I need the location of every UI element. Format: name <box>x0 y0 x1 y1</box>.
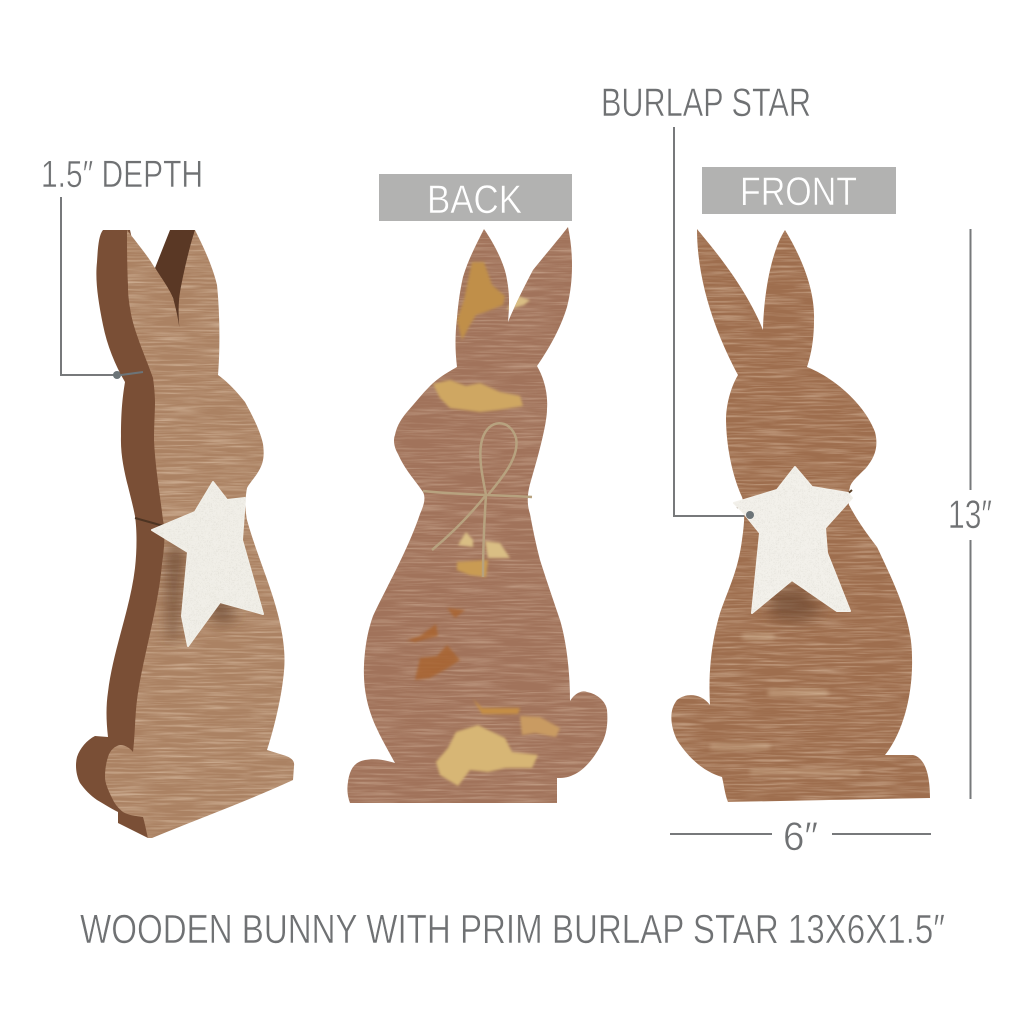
twine bow <box>423 423 532 577</box>
wood highlights <box>710 634 860 774</box>
twine <box>135 518 185 532</box>
star shadow <box>165 540 240 640</box>
chipped paint patches <box>433 262 560 786</box>
dimension: height 13 inches: 13″ <box>948 493 992 537</box>
burlap star: side <box>152 482 263 646</box>
callout: burlap star <box>601 81 811 516</box>
bunny: front view <box>671 229 930 802</box>
dimension: width 6 inches: 6″ <box>783 815 818 859</box>
label: front: FRONT <box>740 170 857 214</box>
bunny: back view <box>340 220 615 810</box>
side depth edge <box>76 230 170 838</box>
burlap star: front <box>734 467 852 613</box>
callout: burlap star: BURLAP STAR <box>601 81 811 125</box>
callout dot <box>746 511 754 519</box>
star shadow <box>770 585 825 622</box>
bunny: side view <box>76 230 294 838</box>
rust marks <box>407 608 465 680</box>
dimension: height 13 inches <box>944 229 1000 799</box>
label: back: BACK <box>427 178 522 222</box>
twine <box>737 490 852 513</box>
callout: depth <box>41 154 203 379</box>
depth pointer <box>121 372 143 375</box>
label: front <box>702 167 896 214</box>
label: back <box>379 174 572 222</box>
callout: depth: 1.5″ DEPTH <box>41 154 203 196</box>
